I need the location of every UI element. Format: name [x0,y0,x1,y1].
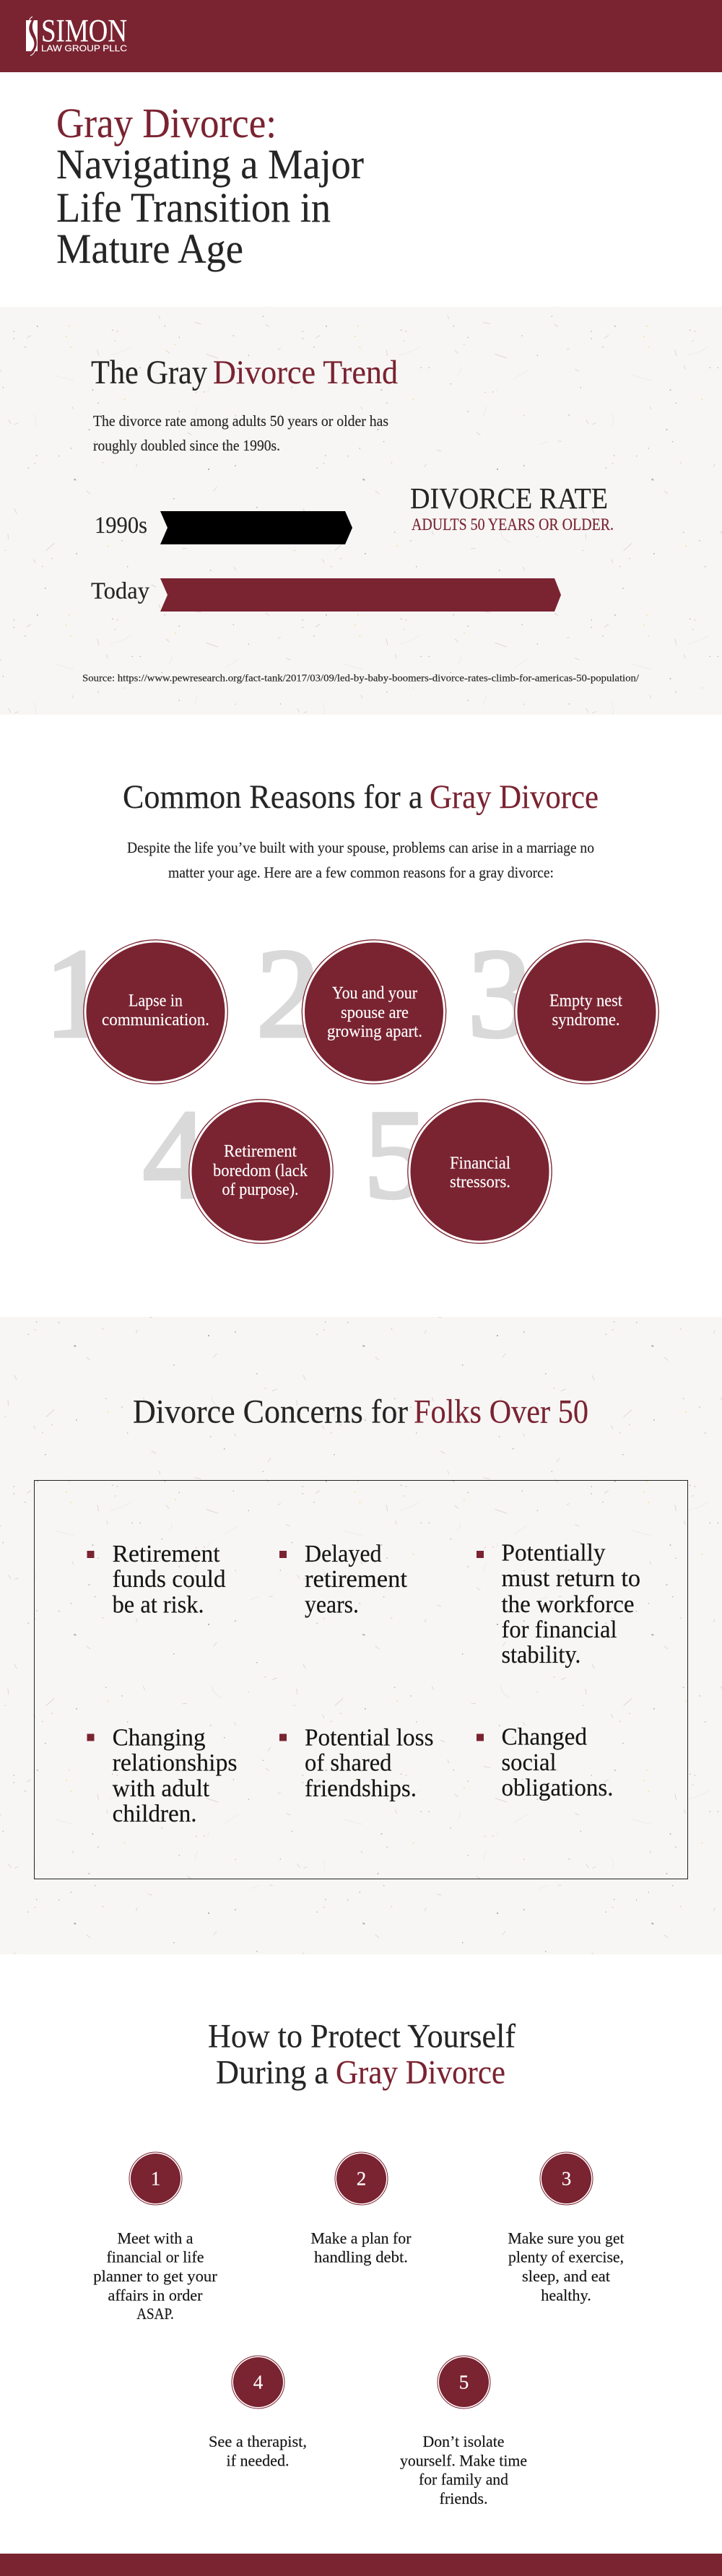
header band [0,0,722,72]
concern: social obligations: Changed [501,1724,587,1750]
heading: common reasons [123,778,599,816]
reason 4: boredom (lack [213,1162,308,1180]
text block: trend description [93,412,388,454]
text block: trend description: roughly doubled since the 1990s. [93,437,280,454]
step 2: Make a plan for [310,2229,412,2247]
concern: adult children: children. [113,1801,197,1827]
text block: reasons intro: matter your age. Here are a few common reasons for a gray divorce: [168,863,554,881]
concern: return to workforce: the workforce [501,1591,634,1618]
concern: return to workforce: Potentially [501,1540,605,1567]
logo: Simon Law Group: SIMON [41,13,127,48]
concern: shared friendships: Potential loss [305,1725,434,1752]
concern: adult children: Changing [113,1725,206,1752]
reason 5: 5 [364,1084,427,1225]
reason 2 [256,923,446,1084]
step 2: handling debt. [314,2248,408,2266]
step 5: Don’t isolate [423,2432,504,2450]
reason 2: growing apart. [327,1022,422,1041]
step 3: 3 [562,2168,571,2190]
footer band [0,2554,722,2576]
reason 3 [468,923,658,1084]
logo: Simon Law Group: LAW GROUP PLLC [41,43,127,53]
bar: 1990s: 1990s [95,513,147,539]
heading: concerns [133,1393,588,1431]
concern: delayed retirement: retirement [305,1566,408,1593]
concern: social obligations: social [501,1749,556,1776]
reason 4 [143,1084,333,1243]
reason 2: spouse are [341,1004,409,1022]
heading: protect yourself: Gray Divorce [336,2053,505,2091]
step 3: Make sure you get [508,2229,624,2247]
text block: reasons intro [127,839,594,881]
text block: trend description: The divorce rate among adults 50 years or older has [93,412,388,430]
step 5: friends. [439,2489,488,2507]
concern: adult children: relationships [113,1750,238,1777]
heading: common reasons: Gray Divorce [430,778,599,816]
panel: how to protect yourself [93,2018,624,2507]
step 5: yourself. Make time [400,2451,527,2469]
step 1: affairs in order [108,2286,203,2305]
step 3: healthy. [541,2286,591,2305]
title: Navigating a Major [56,141,364,188]
concern: social obligations: obligations. [501,1775,614,1801]
step 3 [508,2152,624,2305]
concern: delayed retirement: years. [305,1591,359,1618]
concern: return to workforce [477,1540,640,1668]
reason 5: Financial [450,1154,510,1173]
heading: trend: Divorce Trend [213,354,398,391]
heading: protect yourself [208,2018,516,2091]
step 4: 4 [253,2371,264,2393]
concern: retirement funds: funds could [113,1566,226,1593]
step 1: financial or life [107,2248,204,2266]
text block: reasons intro: Despite the life you’ve built with your spouse, problems can arise in a marriage no [127,839,594,856]
concern: retirement funds: Retirement [113,1541,220,1567]
concern: adult children: with adult [113,1775,210,1802]
concerns box [35,1480,687,1879]
title: Gray Divorce: [56,100,277,147]
title: Mature Age [56,225,243,272]
logo: Simon Law Group [26,13,127,56]
concern: shared friendships: of shared [305,1750,391,1777]
reason 3: syndrome. [552,1011,619,1030]
step 1: 1 [151,2168,160,2190]
step 1 [93,2152,217,2323]
bar: 1990s [95,511,352,544]
reason 1: communication. [102,1011,209,1030]
concern: retirement funds: be at risk. [113,1591,204,1618]
step 5 [400,2356,527,2507]
title [56,100,364,272]
reason 1: 1 [45,923,108,1064]
reason 4: Retirement [224,1142,297,1161]
reason 1: Lapse in [129,992,183,1011]
concern: return to workforce: for financial [501,1616,617,1643]
legend: divorce rate [410,482,614,534]
heading: trend: The Gray [91,354,207,391]
step 2: 2 [357,2168,366,2190]
concern: adult children [87,1725,238,1827]
bar: today: Today [91,578,149,604]
step 4: See a therapist, [209,2432,307,2450]
step 3: plenty of exercise, [508,2248,624,2266]
bar: today [91,578,561,612]
title: Life Transition in [56,184,331,231]
heading: concerns: Divorce Concerns for [133,1393,408,1431]
legend: divorce rate: DIVORCE RATE [410,482,608,515]
concern: delayed retirement: Delayed [305,1541,381,1567]
legend: divorce rate: ADULTS 50 YEARS OR OLDER. [412,515,614,534]
concern: delayed retirement [279,1541,408,1618]
step 1: Meet with a [117,2229,193,2247]
reason 4: of purpose). [222,1180,299,1199]
reason 2: You and your [332,984,417,1003]
concern: return to workforce: must return to [501,1565,640,1592]
step 2 [310,2152,412,2266]
step 5: 5 [459,2371,469,2393]
concern: social obligations [477,1724,614,1801]
step 5: for family and [419,2470,508,2488]
reason 2: 2 [256,923,320,1064]
reason 4: 4 [143,1084,206,1225]
heading: protect yourself: How to Protect Yourself [208,2018,516,2055]
concern: shared friendships [279,1725,434,1802]
panel: divorce concerns [0,1317,722,1954]
step 1: ASAP. [136,2305,174,2323]
heading: protect yourself: During a [216,2053,329,2091]
source note: Source: https://www.pewresearch.org/fact-tank/2017/03/09/led-by-baby-boomers-divorce-rates-climb-for-americas-50-population/ [82,673,639,684]
step 1: planner to get your [93,2267,217,2285]
concern: return to workforce: stability. [501,1642,580,1668]
concern: shared friendships: friendships. [305,1775,417,1802]
panel: the gray divorce trend [0,307,722,715]
concern: retirement funds [87,1541,226,1618]
step 4: if needed. [227,2451,289,2469]
reason 5: stressors. [450,1173,510,1192]
heading: concerns: Folks Over 50 [414,1393,588,1431]
reason 3: Empty nest [549,992,622,1011]
step 4 [209,2356,307,2469]
reason 5 [364,1084,552,1243]
step 3: sleep, and eat [522,2267,610,2285]
heading: trend [91,354,398,391]
reason 1 [45,923,227,1084]
heading: common reasons: Common Reasons for a [123,778,423,816]
panel: common reasons [45,778,658,1243]
reason 3: 3 [468,923,531,1064]
